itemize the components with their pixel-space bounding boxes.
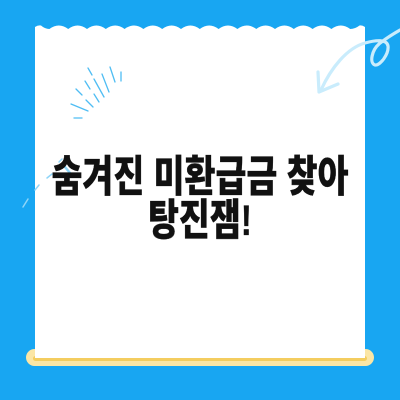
panel: white card with scalloped top xyxy=(35,25,365,358)
yellow bar behind the panel xyxy=(26,349,374,366)
title: 탕진잼! xyxy=(148,196,252,244)
decorative dashes at left edge xyxy=(23,159,70,207)
arrow: curly arrow pointing down left xyxy=(318,30,400,92)
icon: sparkle burst lines xyxy=(71,67,121,118)
title xyxy=(51,153,349,244)
title: 숨겨진 미환급금 찾아 xyxy=(51,153,349,201)
